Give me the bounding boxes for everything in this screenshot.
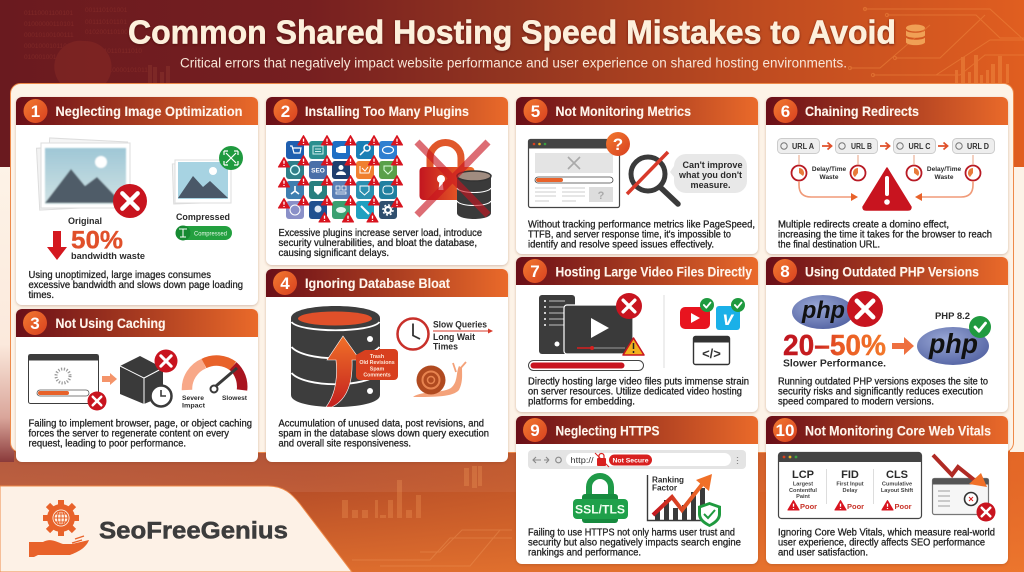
divider and hosting platforms xyxy=(664,295,745,368)
subtitle: Critical errors that negatively impact website performance and user experience on shared hosting environments. xyxy=(180,56,847,70)
illustration: crossed out lock and database xyxy=(417,142,491,219)
illustration: loading browser, box, clock and gauge: Impact xyxy=(182,402,206,410)
icon: ssl tls padlock: SSL/TLS xyxy=(575,502,625,516)
heading: 6 xyxy=(781,102,790,121)
illustration: browser url bar not secure: Not Secure xyxy=(612,457,649,464)
illustration: loading browser, box, clock and gauge: Slowest xyxy=(222,395,248,402)
bottom background bars and circuits xyxy=(342,466,512,566)
illustration: loading browser, box, clock and gauge: Severe xyxy=(182,395,204,402)
description xyxy=(778,376,988,408)
heading: Not Monitoring Core Web Vitals xyxy=(805,424,991,438)
heading: Chaining Redirects xyxy=(805,104,919,119)
illustration: url redirect chain: URL B xyxy=(851,142,872,151)
background decoration: binary and chart motif xyxy=(24,7,170,83)
panel: 1 neglecting image optimization xyxy=(16,97,258,305)
illustration: core web vitals window: CLS xyxy=(886,469,908,481)
illustration: core web vitals window: Cumulative xyxy=(882,482,912,488)
description: causing significant delays. xyxy=(278,248,389,259)
description: Without tracking performance metrics like PageSpeed, xyxy=(528,220,755,230)
heading: 2 xyxy=(281,102,290,121)
description: and user satisfaction. xyxy=(778,548,868,558)
title: Common Shared Hosting Speed Mistakes to Avoid xyxy=(128,14,896,50)
illustration: old php logo vs php 8.2: php xyxy=(928,328,978,359)
cream side strips xyxy=(0,167,1024,462)
description: increasing the time it takes for the browser to reach xyxy=(778,230,992,240)
illustration: browser, magnifier and speech bubble xyxy=(528,132,747,208)
illustration: core web vitals window: First Input xyxy=(836,482,864,488)
background decoration: binary and chart motif: 01110001100101 xyxy=(24,10,74,17)
description: rankings and performance. xyxy=(528,548,641,558)
description: security risks and significantly reduces execution xyxy=(778,386,983,398)
illustration: server with video player xyxy=(528,293,644,370)
panel: 6 chaining redirects xyxy=(766,97,1008,254)
heading xyxy=(516,416,758,444)
illustration: bloated database: Old Revisions xyxy=(359,360,395,366)
chart: ranking factor rising: Factor xyxy=(652,484,677,492)
description: user experience, directly affects SEO performance xyxy=(778,538,985,548)
panel: 9 neglecting https xyxy=(516,416,758,564)
panel: 2 installing too many plugins xyxy=(266,97,508,265)
illustration: plugin icon grid with warnings xyxy=(278,136,403,222)
heading: 8 xyxy=(780,262,790,281)
illustration: old php logo vs php 8.2: 20–50% xyxy=(783,330,886,362)
panel: 10 not monitoring core web vitals xyxy=(766,416,1008,564)
description: and overall site responsiveness. xyxy=(278,438,411,450)
heading: 9 xyxy=(530,421,540,440)
description: Failing to use HTTPS not only harms user trust and xyxy=(528,528,735,538)
heading xyxy=(766,257,1008,285)
description: Excessive plugins increase server load, introduce xyxy=(278,228,482,239)
heading: Neglecting HTTPS xyxy=(556,424,660,438)
description: forces the server to regenerate content on every xyxy=(28,428,229,440)
description: the final destination URL. xyxy=(778,240,880,250)
description: Failing to implement browser, page, or object caching xyxy=(28,418,252,430)
illustration: bloated database: Spam xyxy=(370,366,384,372)
description: Ignoring Core Web Vitals, which measure real-world xyxy=(778,528,995,538)
illustration: core web vitals window xyxy=(778,452,922,518)
description xyxy=(28,418,252,450)
description: security but also negatively impacts search engine xyxy=(528,538,741,548)
illustration: bloated database xyxy=(291,306,398,407)
icon: warning triangle xyxy=(863,168,911,210)
background decoration: binary and chart motif: 01000100101100 xyxy=(24,54,75,61)
illustration: core web vitals window: Largest xyxy=(793,482,813,488)
heading: 3 xyxy=(30,314,40,333)
illustration: core web vitals window: Contentful xyxy=(789,488,817,494)
illustration: browser url bar not secure xyxy=(528,450,746,469)
description: security vulnerabilities, and bloat the database, xyxy=(278,238,477,249)
illustration: core web vitals window: LCP xyxy=(792,469,814,481)
illustration: core web vitals window: Layout Shift xyxy=(881,488,913,494)
background decoration: binary and chart motif: 010110111010 xyxy=(100,48,142,55)
illustration: loading browser, box, clock and gauge xyxy=(28,350,248,410)
description xyxy=(528,376,749,408)
heading: 5 xyxy=(531,102,540,121)
illustration: core web vitals window: FID xyxy=(841,469,859,481)
illustration: clock, slow queries label and snail xyxy=(398,318,493,397)
background decoration: binary and chart motif: 00010100100111 xyxy=(24,32,74,39)
illustration: old php logo vs php 8.2: Slower Performance. xyxy=(783,358,886,370)
illustration: clock, slow queries label and snail: Slow Queries xyxy=(433,320,487,330)
description xyxy=(778,528,995,558)
illustration: url redirect chain: URL A xyxy=(792,142,814,151)
illustration: plugin icon grid with warnings: SEO xyxy=(311,168,325,174)
heading: Using Outdated PHP Versions xyxy=(805,264,979,280)
icon: database in title xyxy=(906,24,925,45)
illustration: original vs compressed image xyxy=(36,138,243,261)
illustration: url redirect chain: Delay/Time xyxy=(812,166,846,173)
background decoration: binary and chart motif: 001110101101 xyxy=(85,19,127,26)
heading xyxy=(16,97,258,125)
heading: Neglecting Image Optimization xyxy=(56,104,242,119)
description: Directly hosting large video files puts immense strain xyxy=(528,376,749,388)
background decoration: binary and chart motif: 010000101011 xyxy=(105,67,148,74)
illustration: browser, magnifier and speech bubble: Can't improve xyxy=(682,160,742,170)
heading xyxy=(266,97,508,125)
divider and hosting platforms: </> xyxy=(702,346,721,361)
panel: 3 not using caching xyxy=(16,309,258,462)
icon: ssl tls padlock xyxy=(573,476,628,523)
illustration: browser, magnifier and speech bubble: ? xyxy=(598,190,605,202)
illustration: core web vitals window: Poor xyxy=(847,502,864,511)
illustration: url redirect chain xyxy=(778,138,994,210)
heading: Not Monitoring Metrics xyxy=(556,104,691,119)
description: platforms for embedding. xyxy=(528,396,635,408)
description xyxy=(278,418,489,450)
divider and hosting platforms: v xyxy=(723,309,735,330)
illustration: url redirect chain: URL C xyxy=(908,142,931,151)
background decoration: binary and chart motif: 001110101001 xyxy=(85,7,128,14)
heading xyxy=(266,269,508,297)
illustration: decline arrow and mini browser error xyxy=(932,455,996,522)
heading: Ignoring Database Bloat xyxy=(305,276,450,291)
brand name: SeoFreeGenius xyxy=(99,518,288,544)
illustration: core web vitals window: Delay xyxy=(843,488,858,494)
description: Running outdated PHP versions exposes the site to xyxy=(778,376,988,388)
chart: ranking factor rising xyxy=(648,474,721,527)
illustration: browser url bar not secure: http:// xyxy=(570,456,594,465)
description: excessive bandwidth and slows down page loading xyxy=(28,280,243,291)
heading xyxy=(16,309,258,337)
heading xyxy=(516,257,758,285)
description xyxy=(278,228,482,259)
chart: ranking factor rising: Ranking xyxy=(652,476,684,484)
illustration: url redirect chain: Waste xyxy=(935,174,954,181)
description xyxy=(778,220,992,250)
illustration: browser, magnifier and speech bubble: what you don't xyxy=(678,170,742,180)
illustration: old php logo vs php 8.2: PHP 8.2 xyxy=(935,311,970,321)
illustration: clock, slow queries label and snail: Long Wait xyxy=(433,332,475,342)
illustration: original vs compressed image: Compressed xyxy=(194,232,227,238)
footer logo panel xyxy=(0,486,352,572)
background decoration: binary and chart motif: 01000000110101 xyxy=(24,21,75,28)
description: Using unoptimized, large images consumes xyxy=(28,270,211,281)
illustration: bloated database: Trash xyxy=(370,354,384,360)
illustration: url redirect chain: URL D xyxy=(967,142,989,151)
illustration: old php logo vs php 8.2: php xyxy=(801,297,845,324)
illustration: old php logo vs php 8.2 xyxy=(783,291,991,370)
description: on server resources. Utilize dedicated video hosting xyxy=(528,386,742,398)
cream content panel xyxy=(10,84,1014,452)
illustration: browser, magnifier and speech bubble: ? xyxy=(613,135,623,154)
description xyxy=(528,528,741,558)
illustration: core web vitals window: Paint xyxy=(796,494,810,500)
illustration: core web vitals window: Poor xyxy=(800,502,817,511)
description: identify and resolve speed issues effectively. xyxy=(528,240,714,250)
heading: 1 xyxy=(31,102,40,121)
background decoration: binary and chart motif: 00010001011010 xyxy=(24,43,75,50)
heading: Installing Too Many Plugins xyxy=(305,104,469,119)
icon: gear with globe over hand xyxy=(29,500,89,557)
illustration: url redirect chain: Waste xyxy=(820,174,839,181)
illustration: url redirect chain: Delay/Time xyxy=(927,166,961,173)
panel: 5 not monitoring metrics xyxy=(516,97,758,254)
description: speed compared to modern versions. xyxy=(778,396,934,408)
description: spam in the database slows down query execution xyxy=(278,428,489,440)
heading: 4 xyxy=(280,274,290,293)
heading: 7 xyxy=(530,262,540,281)
background decoration: binary and chart motif: 010200110100 xyxy=(85,29,128,36)
heading xyxy=(516,97,758,125)
heading xyxy=(766,97,1008,125)
panel: 4 ignoring database bloat xyxy=(266,269,508,462)
heading xyxy=(766,416,1008,444)
illustration: browser, magnifier and speech bubble: measure. xyxy=(690,180,730,190)
heading: 10 xyxy=(776,421,794,440)
illustration: original vs compressed image: Original xyxy=(68,216,102,226)
illustration: bloated database: Comments xyxy=(363,372,391,378)
illustration: original vs compressed image: bandwidth waste xyxy=(71,251,145,261)
description xyxy=(28,270,243,301)
illustration: original vs compressed image: Compressed xyxy=(176,212,230,222)
description: Accumulation of unused data, post revisions, and xyxy=(278,418,484,430)
illustration: core web vitals window: Poor xyxy=(894,502,912,511)
panel: 7 hosting large video files directly xyxy=(516,257,758,412)
description xyxy=(528,220,755,250)
description: Multiple redirects create a domino effect, xyxy=(778,220,949,230)
heading: Hosting Large Video Files Directly xyxy=(556,264,752,280)
description: request, leading to poor performance. xyxy=(28,438,186,450)
description: times. xyxy=(28,290,54,301)
background decoration: circuit traces and bars xyxy=(848,7,1024,83)
heading: Not Using Caching xyxy=(56,316,166,331)
description: TTFB, and server response time, it's impossible to xyxy=(528,230,731,240)
illustration: clock, slow queries label and snail: Times xyxy=(433,342,458,352)
illustration: original vs compressed image: 50% xyxy=(71,226,123,254)
panel: 8 using outdated php versions xyxy=(766,257,1008,412)
